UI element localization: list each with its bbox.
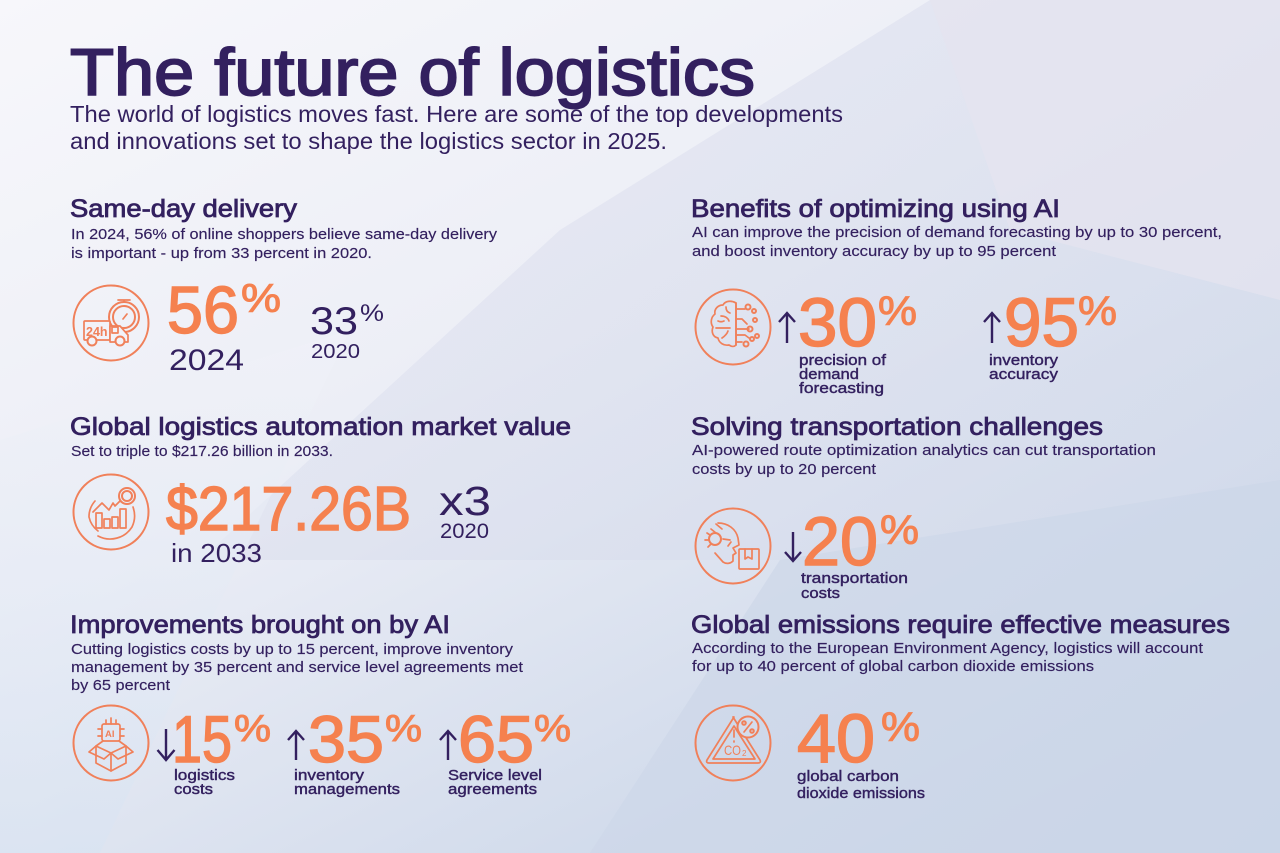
icon: AI head with package <box>696 508 770 584</box>
stat: 15% logistics costs: 15 <box>172 702 232 776</box>
stat: 95% inventory accuracy: 95 <box>1004 284 1079 361</box>
text: emissions description: for up to 40 percent of global carbon dioxide emissions <box>692 658 1094 675</box>
icon: growth chart with coin <box>74 474 148 550</box>
icon: delivery truck with stopwatch <box>74 286 148 360</box>
stat: 56% 2024 <box>167 273 281 377</box>
text: improvements description: management by 35 percent and service level agreements met <box>71 659 524 676</box>
text: emissions description <box>692 640 1204 675</box>
panel: automation market value <box>70 413 571 568</box>
heading: market value: Global logistics automation market value <box>70 413 571 441</box>
stat: 30% precision: 30 <box>798 284 877 361</box>
arrow: down <box>785 532 801 561</box>
stat: 65% service level agreements: agreements <box>448 781 537 798</box>
stat: 95% inventory accuracy: inventory <box>989 352 1059 369</box>
stat: 33% 2020: % <box>360 300 384 327</box>
stat: 20% transportation costs: transportation <box>801 570 908 587</box>
text: benefits description <box>692 224 1222 260</box>
panel: global emissions <box>691 611 1230 802</box>
stat: 30% precision <box>798 284 917 397</box>
text: emissions description: According to the European Environment Agency, logistics will account <box>692 640 1204 657</box>
stat: 65% service level agreements: 65 <box>458 702 534 776</box>
stat: x3 2020 <box>439 478 491 543</box>
stat: 30% precision: precision of <box>799 352 887 369</box>
stat: 35% inventory managements: managements <box>294 781 400 798</box>
stat: 65% service level agreements: Service level <box>448 767 542 784</box>
stat: 15% logistics costs: % <box>234 708 271 750</box>
stat: 95% inventory accuracy: % <box>1078 288 1117 334</box>
stat: 15% logistics costs: costs <box>174 781 213 798</box>
heading: transportation: Solving transportation challenges <box>691 413 1103 441</box>
stat: 65% service level agreements: % <box>534 708 571 750</box>
arrow: up <box>779 313 795 343</box>
text: improvements description <box>71 641 524 694</box>
stat: 35% inventory managements: inventory <box>294 767 365 784</box>
stat: 20% transportation costs: % <box>880 507 919 553</box>
stat: $217.26B in 2033: $217.26B <box>166 475 411 544</box>
stat: 40% carbon dioxide: % <box>881 704 920 750</box>
stat: 20% transportation costs: costs <box>801 585 840 602</box>
stat: 95% inventory accuracy: accuracy <box>989 366 1059 383</box>
text: same-day description <box>71 226 498 262</box>
stat: 56% 2024: 56 <box>167 273 239 348</box>
stat: 40% carbon dioxide: dioxide emissions <box>797 785 925 802</box>
stat: $217.26B in 2033 <box>166 475 411 568</box>
stat: 15% logistics costs <box>172 702 271 798</box>
icon: CO2 warning triangle: CO <box>724 742 741 758</box>
stat: 30% precision: % <box>878 288 917 334</box>
text: benefits description: and boost inventory accuracy by up to 95 percent <box>692 243 1057 260</box>
panel: improvements by AI <box>70 611 571 798</box>
stat: 30% precision: forecasting <box>799 380 884 397</box>
text: transportation description: AI-powered route optimization analytics can cut transportation <box>692 442 1156 459</box>
stat: 35% inventory managements <box>294 702 422 798</box>
stat: 40% carbon dioxide <box>797 700 925 802</box>
text: same-day description: In 2024, 56% of online shoppers believe same-day delivery <box>71 226 498 243</box>
text: improvements description: Cutting logistics costs by up to 15 percent, improve inventory <box>71 641 514 658</box>
text: transportation description <box>692 442 1156 478</box>
arrow: up <box>440 731 456 760</box>
heading: same-day delivery: Same-day delivery <box>70 195 298 223</box>
stat: 33% 2020: 33 <box>310 300 358 343</box>
heading: emissions: Global emissions require effective measures <box>691 611 1230 639</box>
stat: 35% inventory managements: % <box>385 708 422 750</box>
arrow: down <box>158 729 174 760</box>
stat: $217.26B in 2033: in 2033 <box>171 538 262 568</box>
icon: delivery truck with stopwatch: 24h <box>86 325 108 339</box>
intro text <box>70 101 843 154</box>
title: The future of logistics <box>70 35 755 109</box>
stat: x3 2020: x3 <box>439 478 491 524</box>
text: market value description: Set to triple to $217.26 billion in 2033. <box>71 443 333 460</box>
stat: 33% 2020 <box>310 300 384 363</box>
stat: x3 2020: 2020 <box>440 520 489 543</box>
intro text: and innovations set to shape the logistics sector in 2025. <box>70 128 667 154</box>
stat: 95% inventory accuracy <box>989 284 1117 383</box>
stat: 30% precision: demand <box>799 366 859 383</box>
stat: 56% 2024: % <box>241 277 281 321</box>
text: transportation description: costs by up to 20 percent <box>692 461 877 478</box>
text: improvements description: by 65 percent <box>71 677 171 694</box>
panel: transportation challenges <box>691 413 1156 602</box>
icon: AI brain <box>696 290 770 364</box>
icon: CO2 warning triangle: 2 <box>742 749 747 758</box>
stat: 20% transportation costs <box>801 503 919 602</box>
arrow: up <box>288 731 304 760</box>
text: same-day description: is important - up from 33 percent in 2020. <box>71 245 372 262</box>
stat: 40% carbon dioxide: 40 <box>797 700 875 777</box>
icon: AI chip in box <box>74 706 148 780</box>
stat: 15% logistics costs: logistics <box>174 767 235 784</box>
stat: 40% carbon dioxide: global carbon <box>797 768 899 785</box>
stat: 56% 2024: 2024 <box>169 344 244 377</box>
icon: AI chip in box: AI <box>105 729 114 740</box>
icon: CO2 warning triangle <box>696 706 770 780</box>
stat: 65% service level agreements <box>448 702 571 798</box>
panel: benefits of AI <box>691 195 1222 397</box>
text: benefits description: AI can improve the precision of demand forecasting by up to 30 percent, <box>692 224 1222 241</box>
stat: 35% inventory managements: 35 <box>308 702 384 776</box>
panel: same-day delivery <box>70 195 498 377</box>
intro text: The world of logistics moves fast. Here are some of the top developments <box>70 101 843 127</box>
heading: improvements: Improvements brought on by AI <box>70 611 450 639</box>
arrow: up <box>984 313 1000 343</box>
stat: 20% transportation costs: 20 <box>802 503 878 580</box>
stat: 33% 2020: 2020 <box>311 340 360 363</box>
heading: benefits: Benefits of optimizing using AI <box>691 195 1060 223</box>
